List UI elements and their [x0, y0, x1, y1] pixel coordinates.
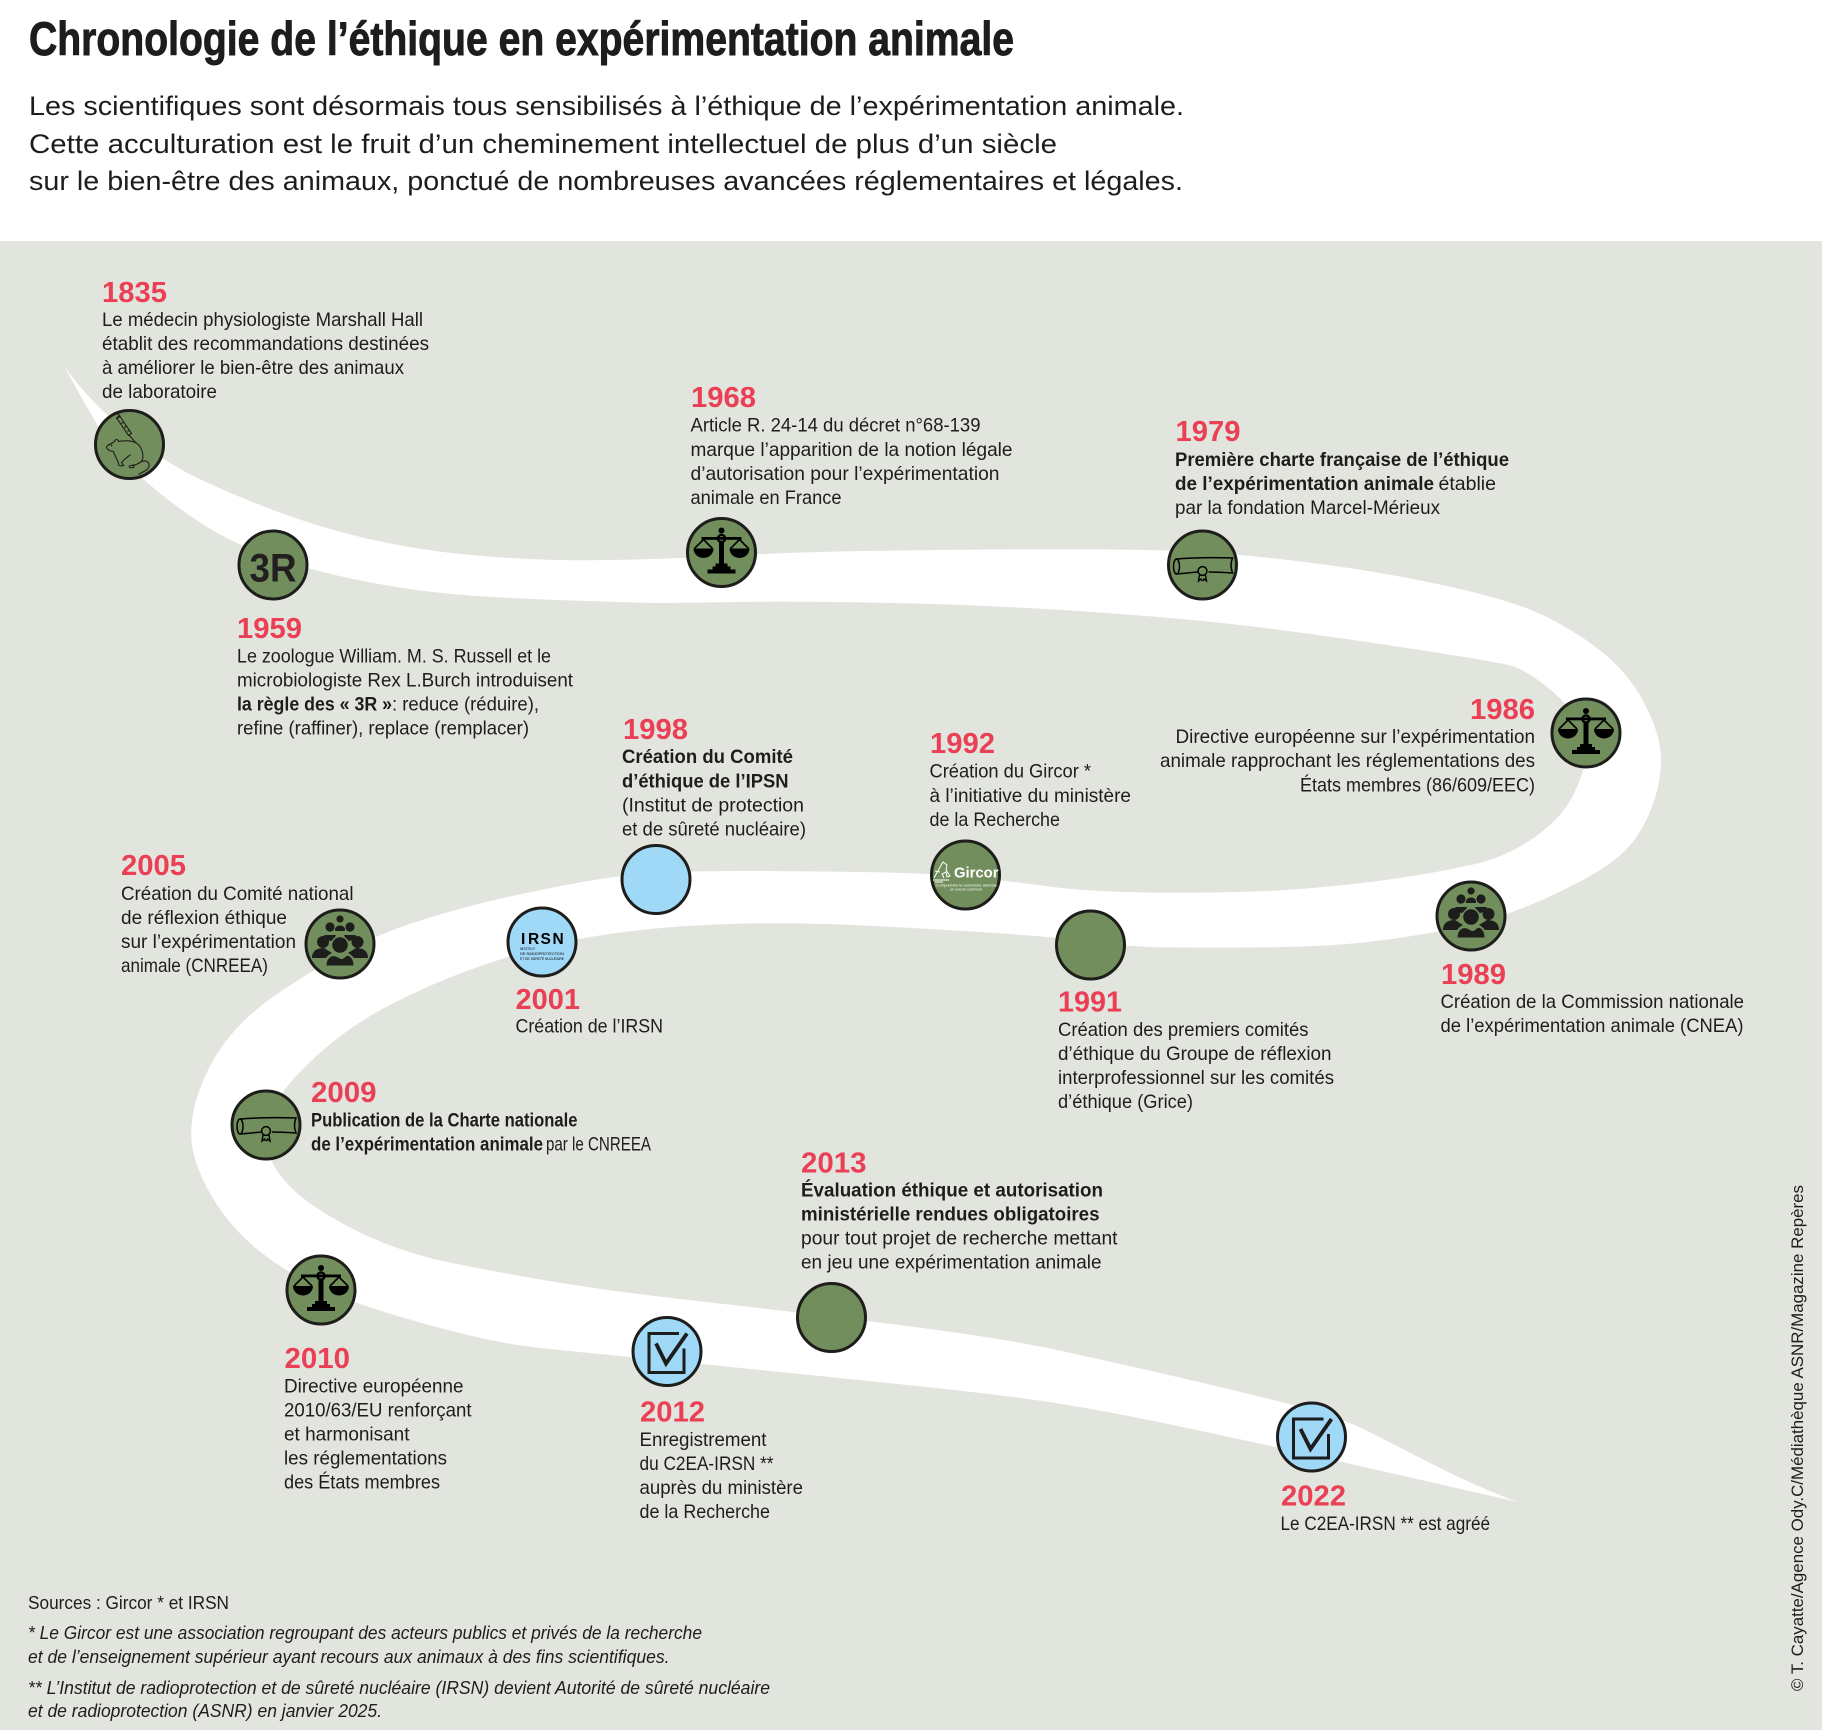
- entry: 1998: (Institut de protection: [622, 794, 804, 816]
- intro text: Cette acculturation est le fruit d’un cheminement intellectuel de plus d’un siècle: [29, 129, 1057, 159]
- entry: 1989: Création de la Commission nationale: [1440, 991, 1744, 1013]
- sources and footnotes: et de l’enseignement supérieur ayant recours aux animaux à des fins scientifiques.: [28, 1646, 670, 1667]
- entry: 2010: les réglementations: [284, 1448, 447, 1470]
- entry: 1835: 1835: [102, 277, 167, 309]
- entry: 1998: Création du Comité: [622, 746, 793, 768]
- entry: 1992: à l’initiative du ministère: [930, 785, 1131, 807]
- icon: IRSN logo: DE RADIOPROTECTION: [520, 952, 564, 956]
- entry: 1968: [688, 382, 1012, 586]
- icon: Gircor logo: un avenir commun: [950, 888, 982, 892]
- entry: 2022: [1278, 1403, 1490, 1535]
- entry: 2013: Évaluation éthique et autorisation: [801, 1178, 1103, 1202]
- icon: Gircor logo: Comprendre la recherche animale: [936, 884, 997, 888]
- entry: 1998: [622, 714, 806, 914]
- entry: 1959: [237, 531, 574, 740]
- entry: 2022: Le C2EA-IRSN ** est agréé: [1280, 1513, 1490, 1535]
- entry: 1998: 1998: [623, 714, 688, 746]
- title: Chronologie de l’éthique en expérimentation animale: [29, 12, 1014, 65]
- icon: IRSN logo: [508, 908, 576, 976]
- entry: 2009: Publication de la Charte nationale: [311, 1110, 578, 1132]
- entry: 2005: sur l’expérimentation: [121, 931, 296, 953]
- entry: 1835: Le médecin physiologiste Marshall Hall: [102, 309, 423, 331]
- entry: 1989: 1989: [1441, 959, 1506, 991]
- entry: 1968: marque l’apparition de la notion légale: [690, 439, 1012, 461]
- entry: 1959: Le zoologue William. M. S. Russell et le: [237, 646, 551, 668]
- entry: 1992: 1992: [930, 728, 995, 760]
- entry: 1991: 1991: [1058, 986, 1122, 1018]
- entry: 1959: 1959: [237, 613, 302, 645]
- icon: diploma: [1168, 531, 1236, 599]
- icon: checkbox: [633, 1318, 701, 1386]
- entry: 1979: par la fondation Marcel-Mérieux: [1175, 497, 1440, 519]
- icon: Gircor logo: [932, 841, 1000, 909]
- entry: 1979: Première charte française de l’éthique: [1175, 449, 1509, 471]
- entry: 1998: d’éthique de l’IPSN: [622, 770, 788, 792]
- photo credit: © T. Cayatte/Agence Ody.C/Médiathèque ASNR/Magazine Repères: [1788, 1185, 1807, 1691]
- entry: 1992: [930, 728, 1131, 909]
- entry: 1991: Création des premiers comités: [1058, 1019, 1309, 1041]
- icon: Gircor logo: Gircor: [954, 864, 999, 882]
- entry: 1968: 1968: [691, 382, 756, 414]
- entry: 1968: animale en France: [690, 487, 842, 509]
- entry: 1959: : reduce (réduire),: [392, 694, 539, 716]
- entry: 1835: à améliorer le bien-être des animaux: [102, 357, 404, 379]
- entry: 2010: et harmonisant: [284, 1424, 410, 1446]
- icon: scales: [287, 1256, 355, 1324]
- entry: 2012: de la Recherche: [640, 1501, 770, 1523]
- entry: 1959: microbiologiste Rex L.Burch introduisent: [237, 670, 574, 692]
- entry: 1991: interprofessionnel sur les comités: [1058, 1067, 1334, 1089]
- entry: 2009: par le CNREEA: [546, 1134, 651, 1156]
- entry: 2005: Création du Comité national: [121, 883, 354, 905]
- entry: 1835: de laboratoire: [102, 381, 217, 403]
- entry: 2013: en jeu une expérimentation animale: [801, 1252, 1102, 1274]
- entry: 2013: [798, 1148, 1118, 1352]
- icon: group of people: [1437, 882, 1505, 950]
- entry: 2013: pour tout projet de recherche mettant: [801, 1228, 1118, 1250]
- entry: 2010: des États membres: [284, 1470, 440, 1494]
- entry: 2012: auprès du ministère: [640, 1477, 803, 1499]
- entry: 2010: [284, 1256, 472, 1494]
- icon: diploma: [232, 1091, 300, 1159]
- entry: 1991: d’éthique du Groupe de réflexion: [1058, 1043, 1332, 1065]
- entry: 2001: [508, 908, 663, 1038]
- entry: 1979: établie: [1438, 473, 1496, 495]
- entry: 1986: Directive européenne sur l’expérimentation: [1176, 726, 1535, 748]
- intro text: [29, 91, 1184, 196]
- entry: 1992: Création du Gircor *: [930, 760, 1091, 782]
- sources and footnotes: [28, 1592, 770, 1721]
- entry: 2009: 2009: [311, 1077, 376, 1109]
- entry: 2010: Directive européenne: [284, 1376, 464, 1398]
- sources and footnotes: et de radioprotection (ASNR) en janvier 2025.: [28, 1700, 382, 1721]
- entry: 1968: d’autorisation pour l’expérimentation: [690, 463, 1000, 485]
- entry: 1992: de la Recherche: [930, 809, 1060, 831]
- icon: group of people: [306, 910, 374, 978]
- icon: IRSN logo: ET DE SÛRETÉ NUCLÉAIRE: [520, 956, 565, 961]
- entry: 1991: d’éthique (Grice): [1058, 1091, 1193, 1113]
- entry: 2013: 2013: [801, 1148, 866, 1180]
- sources and footnotes: Sources : Gircor * et IRSN: [28, 1592, 229, 1613]
- entry: 2005: [121, 850, 374, 978]
- entry: 1979: 1979: [1176, 416, 1240, 448]
- entry: 2012: 2012: [640, 1396, 705, 1428]
- entry: 1979: de l’expérimentation animale: [1175, 473, 1434, 495]
- entry: 2012: Enregistrement: [640, 1429, 767, 1451]
- entry: 1986: animale rapprochant les réglementations des: [1160, 750, 1535, 772]
- entry: 1835: établit des recommandations destinées: [102, 333, 429, 355]
- entry: 1986: [1160, 694, 1620, 796]
- entry: 1986: États membres (86/609/EEC): [1300, 774, 1535, 796]
- sources and footnotes: * Le Gircor est une association regroupant des acteurs publics et privés de la recherche: [28, 1622, 702, 1643]
- entry: 1835: [96, 277, 429, 478]
- entry: 1959: la règle des « 3R »: [237, 694, 392, 716]
- entry: 1959: refine (raffiner), replace (remplacer): [237, 718, 529, 740]
- entry: 1989: de l’expérimentation animale (CNEA): [1440, 1015, 1744, 1037]
- entry: 2005: de réflexion éthique: [121, 907, 287, 929]
- entry: 2013: ministérielle rendues obligatoires: [801, 1204, 1100, 1226]
- winding timeline ribbon: [64, 366, 1661, 1502]
- icon: plain green marker: [1056, 911, 1124, 979]
- icon: plain blue marker: [622, 846, 690, 914]
- entry: 1968: Article R. 24-14 du décret n°68-139: [690, 414, 980, 436]
- icon: 3R: [239, 531, 307, 599]
- entry: 1986: 1986: [1470, 694, 1535, 726]
- intro text: sur le bien-être des animaux, ponctué de nombreuses avancées réglementaires et légales.: [29, 166, 1183, 196]
- entry: 2009: de l’expérimentation animale: [311, 1134, 543, 1156]
- entry: 2012: du C2EA-IRSN **: [640, 1453, 774, 1475]
- entry: 2005: animale (CNREEA): [121, 955, 268, 977]
- icon: 3R: 3R: [250, 546, 297, 590]
- icon: plain green marker: [798, 1284, 866, 1352]
- entry: 2010: 2010: [284, 1343, 350, 1375]
- entry: 2010: 2010/63/EU renforçant: [284, 1400, 472, 1422]
- entry: 1998: et de sûreté nucléaire): [622, 818, 806, 840]
- entry: 2005: 2005: [121, 850, 186, 882]
- entry: 1991: [1056, 911, 1334, 1113]
- entry: 2009: [232, 1077, 651, 1159]
- entry: 2022: 2022: [1281, 1480, 1346, 1512]
- entry: 2001: 2001: [516, 984, 580, 1016]
- sources and footnotes: ** L’Institut de radioprotection et de sûreté nucléaire (IRSN) devient Autorité de sûreté nucléaire: [28, 1677, 770, 1698]
- icon: scales: [688, 518, 756, 586]
- icon: checkbox: [1278, 1403, 1346, 1471]
- icon: IRSN logo: INSTITUT: [520, 947, 536, 951]
- entry: 2012: [633, 1318, 803, 1523]
- icon: rat and syringe: [96, 410, 164, 478]
- icon: scales: [1552, 699, 1620, 767]
- entry: 1989: [1437, 882, 1744, 1037]
- entry: 2001: Création de l’IRSN: [516, 1016, 663, 1038]
- entry: 1979: [1168, 416, 1509, 599]
- icon: IRSN logo: IRSN: [521, 931, 564, 948]
- intro text: Les scientifiques sont désormais tous sensibilisés à l’éthique de l’expérimentation animale.: [29, 91, 1184, 121]
